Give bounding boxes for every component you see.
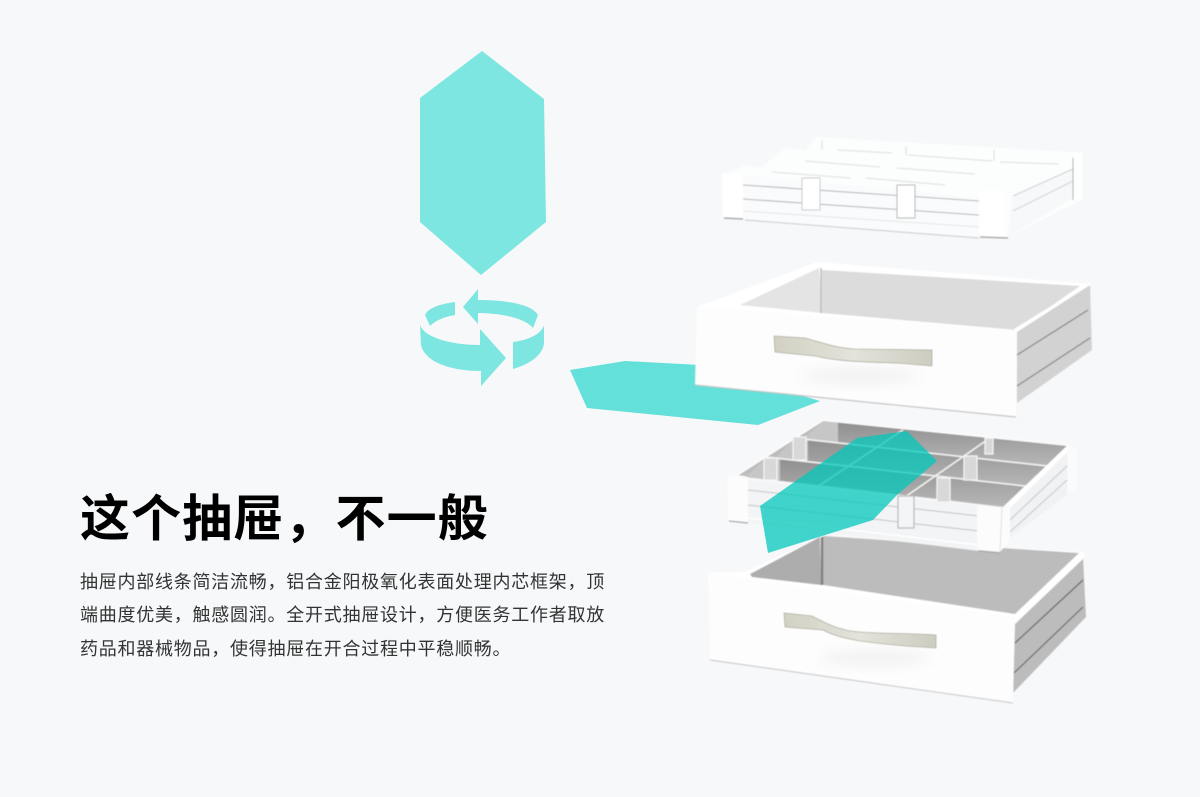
organiser clips xyxy=(764,437,993,502)
description text: 药品和器械物品，使得抽屉在开合过程中平稳顺畅。 xyxy=(80,639,511,659)
tray clip right xyxy=(897,185,915,218)
lower drawer handle xyxy=(784,613,936,648)
description text: 端曲度优美，触感圆润。全开式抽屉设计，方便医务工作者取放 xyxy=(80,605,605,625)
organiser side wall xyxy=(1010,453,1067,538)
organiser rear post xyxy=(1068,447,1077,493)
drawer front panel xyxy=(695,307,1017,417)
drawer handle xyxy=(774,336,932,366)
organiser outer rim xyxy=(737,420,1068,475)
grey organiser tray xyxy=(727,420,1077,553)
tray front wall xyxy=(743,175,979,237)
tray rear post xyxy=(1073,152,1082,201)
lower drawer side rails xyxy=(1013,557,1086,693)
top white tray xyxy=(722,137,1082,238)
drawer handle shadow xyxy=(800,369,920,383)
organiser compartment walls xyxy=(746,421,1066,506)
organiser front wall xyxy=(748,480,979,551)
tray right post xyxy=(979,190,1005,237)
drawer left wall xyxy=(740,268,822,313)
organiser right post xyxy=(977,503,1010,552)
lower drawer handle shadow xyxy=(820,651,930,665)
organiser front clip xyxy=(898,496,914,528)
organiser left post xyxy=(727,475,748,522)
organiser divider lines xyxy=(766,430,1047,497)
icon: rotation arrows xyxy=(420,289,544,386)
description text xyxy=(80,572,605,659)
tray side wall xyxy=(1008,168,1073,236)
organiser interior floor xyxy=(737,420,1068,507)
drawer back wall xyxy=(822,270,1080,330)
drawer side rails xyxy=(1017,285,1092,403)
description text: 抽屉内部线条简洁流畅，铝合金阳极氧化表面处理内芯框架，顶 xyxy=(80,572,605,592)
translucent pointer over organiser xyxy=(760,431,937,553)
upper drawer xyxy=(695,262,1092,417)
tray bottom edge xyxy=(745,220,979,238)
pointer shape behind drawer xyxy=(570,361,820,425)
tray clip left xyxy=(802,178,820,210)
tray left post xyxy=(722,173,743,218)
hexagon shape xyxy=(420,51,546,275)
lower drawer left wall xyxy=(750,537,821,585)
lower drawer front panel xyxy=(708,573,1015,703)
lower drawer xyxy=(708,536,1086,703)
tray interior dividers xyxy=(772,140,1058,185)
title: 这个抽屉，不一般 xyxy=(80,491,489,547)
lower drawer back wall xyxy=(823,536,1079,614)
